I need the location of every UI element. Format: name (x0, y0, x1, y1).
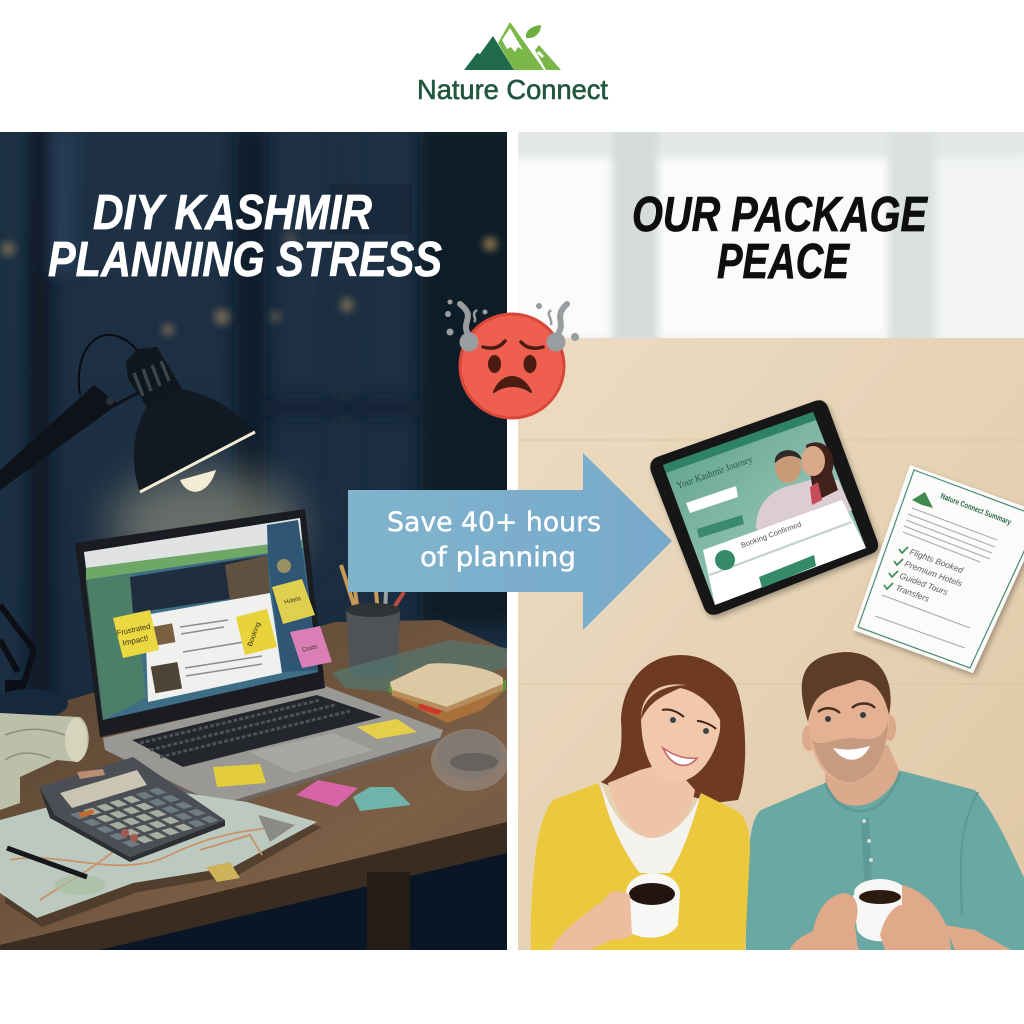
checklist: Guided Tours (898, 570, 950, 597)
woman (531, 655, 750, 950)
glass ashtray (431, 729, 509, 791)
paper map on desk (0, 785, 322, 927)
heading: DIY Kashmir planning stress: PLANNING STRESS (48, 233, 442, 287)
man's coffee mug (790, 879, 1011, 950)
frowning mouth (494, 377, 531, 392)
steam right (556, 304, 567, 337)
logo: Nature Connect (417, 22, 608, 105)
sticky notes on the laptop (113, 579, 332, 668)
tablet (650, 400, 878, 615)
heading: our package peace: OUR PACKAGE (632, 188, 928, 242)
checklist (884, 546, 965, 604)
steam cloud left (460, 332, 478, 352)
arrow text (387, 507, 601, 573)
heading: DIY Kashmir planning stress: DIY KASHMIR (93, 186, 373, 240)
rolled map (0, 713, 89, 810)
laptop (75, 509, 443, 808)
sticky notes on the laptop: Impact! (122, 633, 149, 648)
heading: DIY Kashmir planning stress (48, 194, 442, 277)
checklist: Transfers (894, 582, 932, 604)
sticky notes on the laptop: Hotels (284, 596, 302, 606)
icon: stressed emoji (445, 300, 579, 418)
ears (802, 725, 812, 751)
arrow: save 40+ hours (348, 453, 672, 630)
divider (507, 132, 518, 950)
panel: our package peace (510, 125, 1024, 950)
icon: mountains and leaf (464, 22, 561, 70)
steam cloud right (546, 332, 566, 352)
checklist: Premium Hotels (903, 558, 964, 589)
pen (7, 848, 87, 877)
calculator (39, 757, 225, 862)
desk lamp (0, 335, 255, 492)
brand name: Nature Connect (417, 74, 608, 105)
sandwich and place mat (332, 640, 507, 723)
sticky notes on the laptop: Booking (247, 621, 262, 648)
heading: our package peace (634, 196, 928, 279)
man (745, 652, 1024, 950)
tablet title: Your Kashmir Journey (675, 454, 754, 492)
heading: our package peace: PEACE (717, 235, 850, 289)
panel: DIY planning stress (0, 125, 520, 950)
notes on desk (213, 719, 417, 811)
sticky notes on the laptop: Costs (302, 644, 318, 654)
wood table (518, 338, 1024, 950)
steam left (460, 304, 470, 337)
arrow text: Save 40+ hours (387, 507, 601, 538)
second lamp base (0, 605, 68, 719)
steam puffs (445, 300, 579, 341)
arrow text: of planning (420, 542, 576, 573)
sticky notes on the laptop: Frustrated (116, 622, 151, 638)
night window background (0, 125, 520, 950)
bright window (510, 125, 1024, 345)
tablet couple photo (756, 442, 852, 530)
eyes (488, 355, 536, 373)
pencil cup (341, 555, 404, 678)
eyebrows (483, 341, 543, 348)
woman's coffee mug (551, 873, 680, 950)
booking confirmed label: Booking Confirmed (740, 520, 803, 550)
couple with coffee (531, 652, 1024, 950)
checklist: Flights Booked (908, 546, 965, 575)
wooden desk (0, 620, 507, 950)
itinerary document (853, 465, 1024, 673)
